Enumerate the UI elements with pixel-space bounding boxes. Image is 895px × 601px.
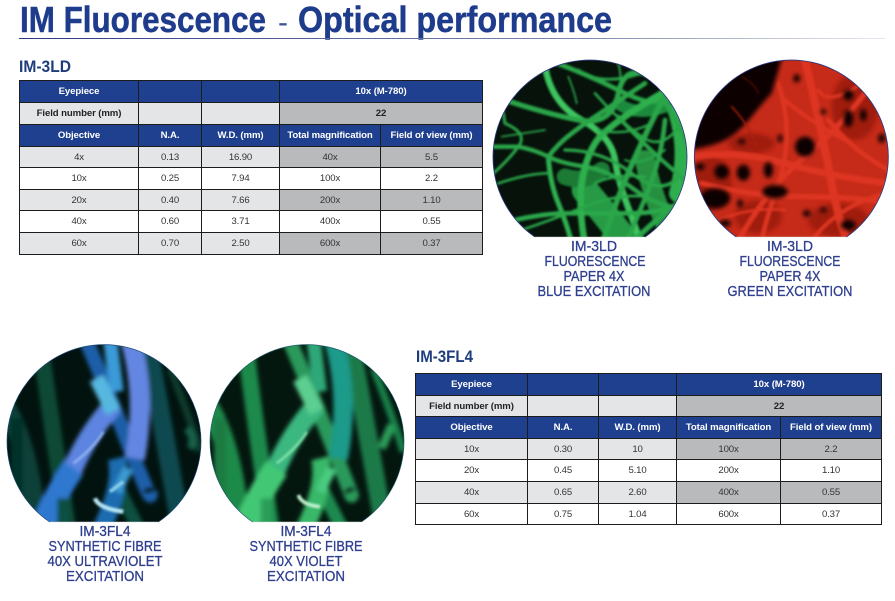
- micrograph: paper under green excitation: [694, 60, 889, 238]
- table: IM-3LD optical data: 60x: [71, 238, 87, 249]
- table: IM-3LD optical data: 10x: [71, 173, 87, 184]
- table: IM-3FL4 optical data: 100x: [718, 444, 739, 454]
- caption: green fibre micrograph: [250, 523, 362, 585]
- micrograph: synthetic fibre under ultraviolet excitation: [6, 344, 202, 522]
- table: IM-3FL4 optical data: 22: [774, 400, 784, 412]
- caption: green fibre micrograph: EXCITATION: [267, 568, 345, 585]
- table: IM-3LD optical data: 1.10: [422, 194, 441, 206]
- table: IM-3FL4 optical data: 0.75: [554, 508, 572, 520]
- table: IM-3FL4 optical data: 2.60: [628, 487, 647, 498]
- table: IM-3FL4 optical data: 1.10: [822, 465, 840, 476]
- caption: red micrograph: FLUORESCENCE: [740, 253, 840, 270]
- table: IM-3FL4 optical data: Eyepiece: [451, 379, 492, 390]
- heading: IM-3LD: IM-3LD: [19, 57, 71, 76]
- table: IM-3FL4 optical data: [415, 373, 882, 525]
- heading: IM-3FL4: IM-3FL4: [416, 347, 473, 366]
- table: IM-3LD optical data: 0.70: [161, 238, 179, 249]
- title: [19, 0, 885, 40]
- table: IM-3LD optical data: 40x: [322, 152, 338, 162]
- table: IM-3FL4 optical data: Total magnification: [686, 422, 771, 433]
- caption: red micrograph: [728, 238, 852, 300]
- table: IM-3FL4 optical data: 200x: [718, 465, 739, 476]
- table: IM-3LD optical data: Eyepiece: [59, 86, 99, 97]
- caption: green fibre micrograph: 40X VIOLET: [270, 553, 342, 570]
- table: IM-3LD optical data: W.D. (mm): [217, 130, 264, 141]
- table: IM-3FL4 optical data: 10: [632, 444, 643, 454]
- table: IM-3FL4 optical data: 40x: [464, 487, 479, 498]
- micrograph: synthetic fibre under violet excitation: [210, 344, 404, 522]
- table: IM-3FL4 optical data: Field number (mm): [429, 400, 514, 412]
- table: IM-3LD optical data: 10x (M-780): [355, 86, 407, 97]
- table: IM-3LD optical data: 2.2: [425, 173, 438, 184]
- title: Optical performance: [298, 0, 612, 40]
- caption: blue micrograph: IM-3FL4: [80, 523, 130, 540]
- table: IM-3FL4 optical data: 0.37: [822, 508, 840, 520]
- caption: green fibre micrograph: IM-3FL4: [280, 523, 332, 540]
- table: IM-3FL4 optical data: 0.55: [822, 487, 840, 498]
- table: IM-3FL4 optical data: 10x (M-780): [753, 379, 805, 390]
- table: IM-3FL4 optical data: 600x: [718, 508, 739, 520]
- caption: blue micrograph: [48, 523, 162, 585]
- micrograph: paper under blue excitation: [492, 60, 688, 238]
- table: IM-3LD optical data: 0.60: [161, 216, 179, 227]
- table: IM-3FL4 optical data: 60x: [464, 508, 479, 520]
- table: IM-3FL4 optical data: W.D. (mm): [614, 422, 660, 433]
- table: IM-3LD optical data: 40x: [71, 216, 87, 227]
- table: IM-3FL4 optical data: 400x: [718, 487, 739, 498]
- table: IM-3FL4 optical data: Objective: [450, 422, 493, 433]
- table: IM-3FL4 optical data: 20x: [464, 465, 479, 476]
- table: IM-3FL4 optical data: Field of view (mm): [790, 422, 872, 433]
- table: IM-3LD optical data: 200x: [320, 194, 340, 206]
- caption: red micrograph: PAPER 4X: [760, 268, 820, 285]
- table: IM-3LD optical data: Field number (mm): [37, 108, 121, 119]
- table: IM-3LD optical data: N.A.: [161, 130, 179, 141]
- table: IM-3LD optical data: 0.13: [161, 152, 179, 162]
- table: IM-3LD optical data: 100x: [320, 173, 340, 184]
- table: IM-3LD optical data: 3.71: [231, 216, 250, 227]
- table: IM-3FL4 optical data: 2.2: [825, 444, 837, 454]
- table: IM-3FL4 optical data: 0.45: [554, 465, 572, 476]
- title: -: [278, 6, 288, 39]
- table: IM-3LD optical data: 0.37: [422, 238, 441, 249]
- table: IM-3LD optical data: 7.94: [231, 173, 250, 184]
- table: IM-3LD optical data: 0.40: [161, 194, 179, 206]
- table: IM-3FL4 optical data: 0.30: [554, 444, 572, 454]
- caption: green micrograph: IM-3LD: [571, 238, 617, 255]
- table: IM-3FL4 optical data: 5.10: [628, 465, 647, 476]
- table: IM-3LD optical data: 5.5: [425, 152, 438, 162]
- table: IM-3LD optical data: 22: [376, 108, 386, 119]
- table: IM-3LD optical data: 400x: [320, 216, 340, 227]
- table: IM-3LD optical data: 4x: [74, 152, 84, 162]
- caption: blue micrograph: EXCITATION: [66, 568, 144, 585]
- table: IM-3LD optical data: 2.50: [231, 238, 250, 249]
- table: IM-3LD optical data: [19, 80, 483, 255]
- table: IM-3LD optical data: 20x: [71, 194, 87, 206]
- caption: green micrograph: PAPER 4X: [564, 268, 624, 285]
- table: IM-3LD optical data: 0.55: [422, 216, 441, 227]
- table: IM-3FL4 optical data: 1.04: [628, 508, 647, 520]
- title: IM Fluorescence: [20, 0, 266, 40]
- caption: red micrograph: IM-3LD: [767, 238, 813, 255]
- table: IM-3FL4 optical data: 10x: [464, 444, 479, 454]
- table: IM-3LD optical data: 16.90: [229, 152, 252, 162]
- table: IM-3LD optical data: 600x: [320, 238, 340, 249]
- table: IM-3LD optical data: 0.25: [161, 173, 179, 184]
- table: IM-3LD optical data: Objective: [58, 130, 100, 141]
- caption: green micrograph: [538, 238, 650, 300]
- table: IM-3FL4 optical data: 0.65: [554, 487, 572, 498]
- table: IM-3FL4 optical data: N.A.: [554, 422, 572, 433]
- table: IM-3LD optical data: Field of view (mm): [391, 130, 472, 141]
- table: IM-3LD optical data: Total magnification: [287, 130, 373, 141]
- table: IM-3LD optical data: 7.66: [231, 194, 250, 206]
